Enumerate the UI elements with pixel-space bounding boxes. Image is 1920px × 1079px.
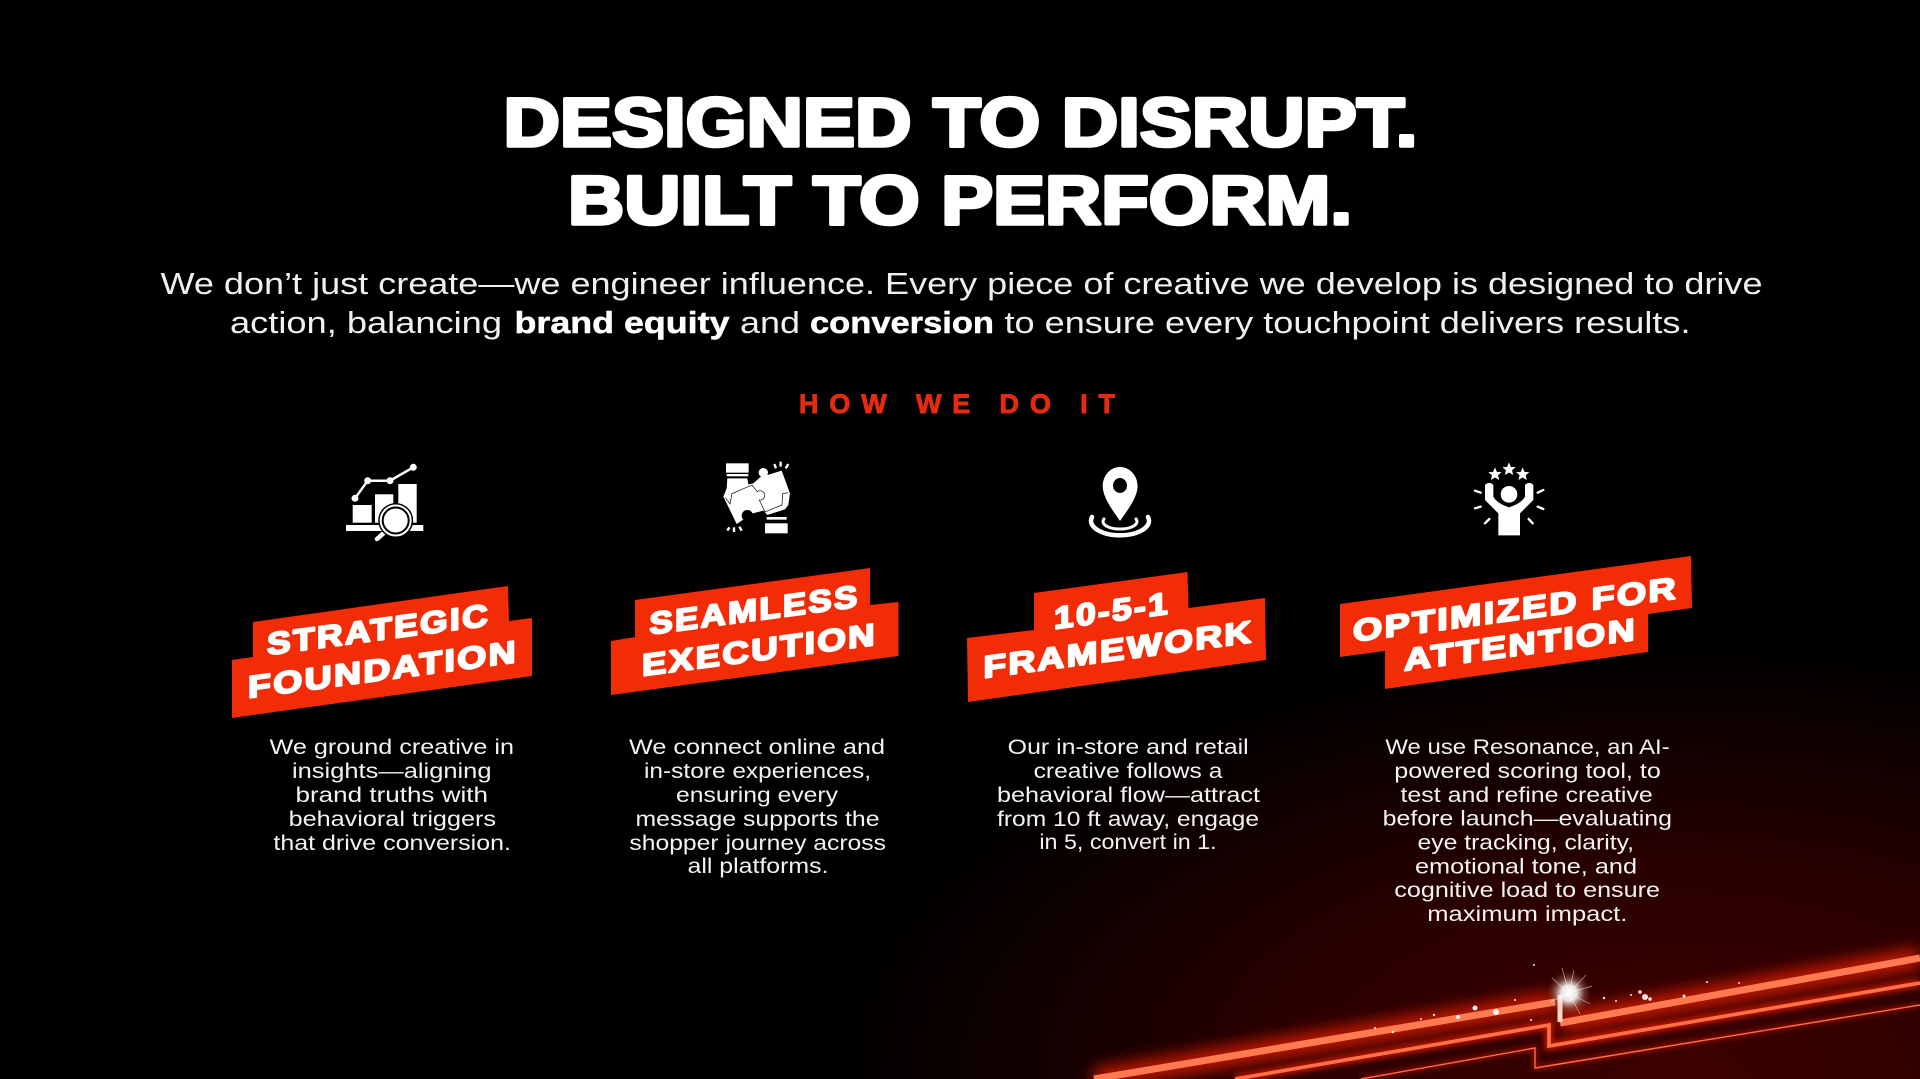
description: 10-5-1 framework: behavioral flow—attract: [997, 784, 1260, 807]
icon: person with stars: [1475, 462, 1543, 535]
panel: strategic foundation: [232, 464, 532, 855]
title: BUILT TO PERFORM.: [568, 162, 1352, 239]
banner: strategic foundation: FOUNDATION: [248, 634, 518, 705]
description: optimized for attention: eye tracking, clarity,: [1418, 831, 1634, 854]
banner: 10-5-1 framework: 10-5-1: [1054, 586, 1170, 636]
banner: optimized for attention: OPTIMIZED FOR: [1353, 570, 1678, 649]
intro paragraph: action, balancing: [230, 305, 502, 340]
description: optimized for attention: maximum impact.: [1427, 903, 1627, 926]
description: strategic foundation: [270, 736, 514, 855]
description: optimized for attention: powered scoring tool, to: [1394, 760, 1661, 783]
description: 10-5-1 framework: [997, 736, 1260, 854]
intro paragraph: conversion: [810, 305, 994, 340]
description: seamless execution: We connect online and: [629, 736, 885, 759]
panel: optimized for attention: [1340, 462, 1692, 926]
banner: 10-5-1 framework: [967, 572, 1266, 702]
description: strategic foundation: behavioral triggers: [289, 808, 496, 831]
description: strategic foundation: that drive conversion.: [273, 832, 511, 855]
description: seamless execution: ensuring every: [676, 784, 839, 807]
icon: location pin: [1091, 467, 1149, 535]
description: 10-5-1 framework: creative follows a: [1034, 760, 1223, 783]
description: seamless execution: in-store experiences,: [644, 760, 871, 783]
title: DESIGNED TO DISRUPT.: [504, 84, 1418, 161]
banner: strategic foundation: [232, 586, 532, 718]
banner: seamless execution: [611, 568, 898, 695]
description: optimized for attention: before launch—evaluating: [1383, 808, 1672, 831]
banner: seamless execution: EXECUTION: [642, 617, 877, 683]
icon: bar chart with magnifier: [346, 464, 423, 539]
description: seamless execution: message supports the: [636, 808, 880, 831]
banner: 10-5-1 framework: FRAMEWORK: [984, 614, 1254, 685]
description: strategic foundation: brand truths with: [296, 784, 488, 807]
description: strategic foundation: insights—aligning: [292, 760, 492, 783]
panel: 10-5-1 framework: [967, 467, 1266, 854]
intro paragraph: brand equity: [514, 305, 730, 340]
section heading: HOW WE DO IT: [799, 389, 1116, 419]
description: 10-5-1 framework: Our in-store and retail: [1008, 736, 1249, 759]
intro paragraph: and: [740, 305, 800, 340]
description: strategic foundation: We ground creative in: [270, 736, 514, 759]
neon lines with spark: [1094, 958, 1920, 1079]
banner: strategic foundation: STRATEGIC: [267, 597, 490, 662]
description: seamless execution: all platforms.: [688, 855, 828, 878]
description: optimized for attention: cognitive load to ensure: [1394, 879, 1660, 902]
banner: optimized for attention: [1340, 556, 1692, 689]
banner: seamless execution: SEAMLESS: [650, 579, 860, 641]
description: 10-5-1 framework: from 10 ft away, engage: [997, 808, 1259, 831]
panel: seamless execution: [611, 462, 898, 878]
description: seamless execution: shopper journey across: [629, 832, 886, 855]
description: 10-5-1 framework: in 5, convert in 1.: [1039, 831, 1217, 854]
description: optimized for attention: test and refine creative: [1400, 784, 1653, 807]
intro paragraph: [160, 266, 1762, 340]
banner: optimized for attention: ATTENTION: [1404, 612, 1637, 678]
description: seamless execution: [629, 736, 886, 878]
intro paragraph: We don’t just create—we engineer influence. Every piece of creative we develop is designed to drive: [160, 266, 1762, 301]
background glow: [800, 600, 1920, 1079]
description: optimized for attention: We use Resonance, an AI-: [1385, 736, 1670, 759]
description: optimized for attention: emotional tone, and: [1415, 855, 1637, 878]
description: optimized for attention: [1383, 736, 1672, 926]
intro paragraph: to ensure every touchpoint delivers results.: [1004, 305, 1690, 340]
icon: hands joining puzzle pieces: [723, 462, 790, 533]
title: [504, 84, 1418, 239]
